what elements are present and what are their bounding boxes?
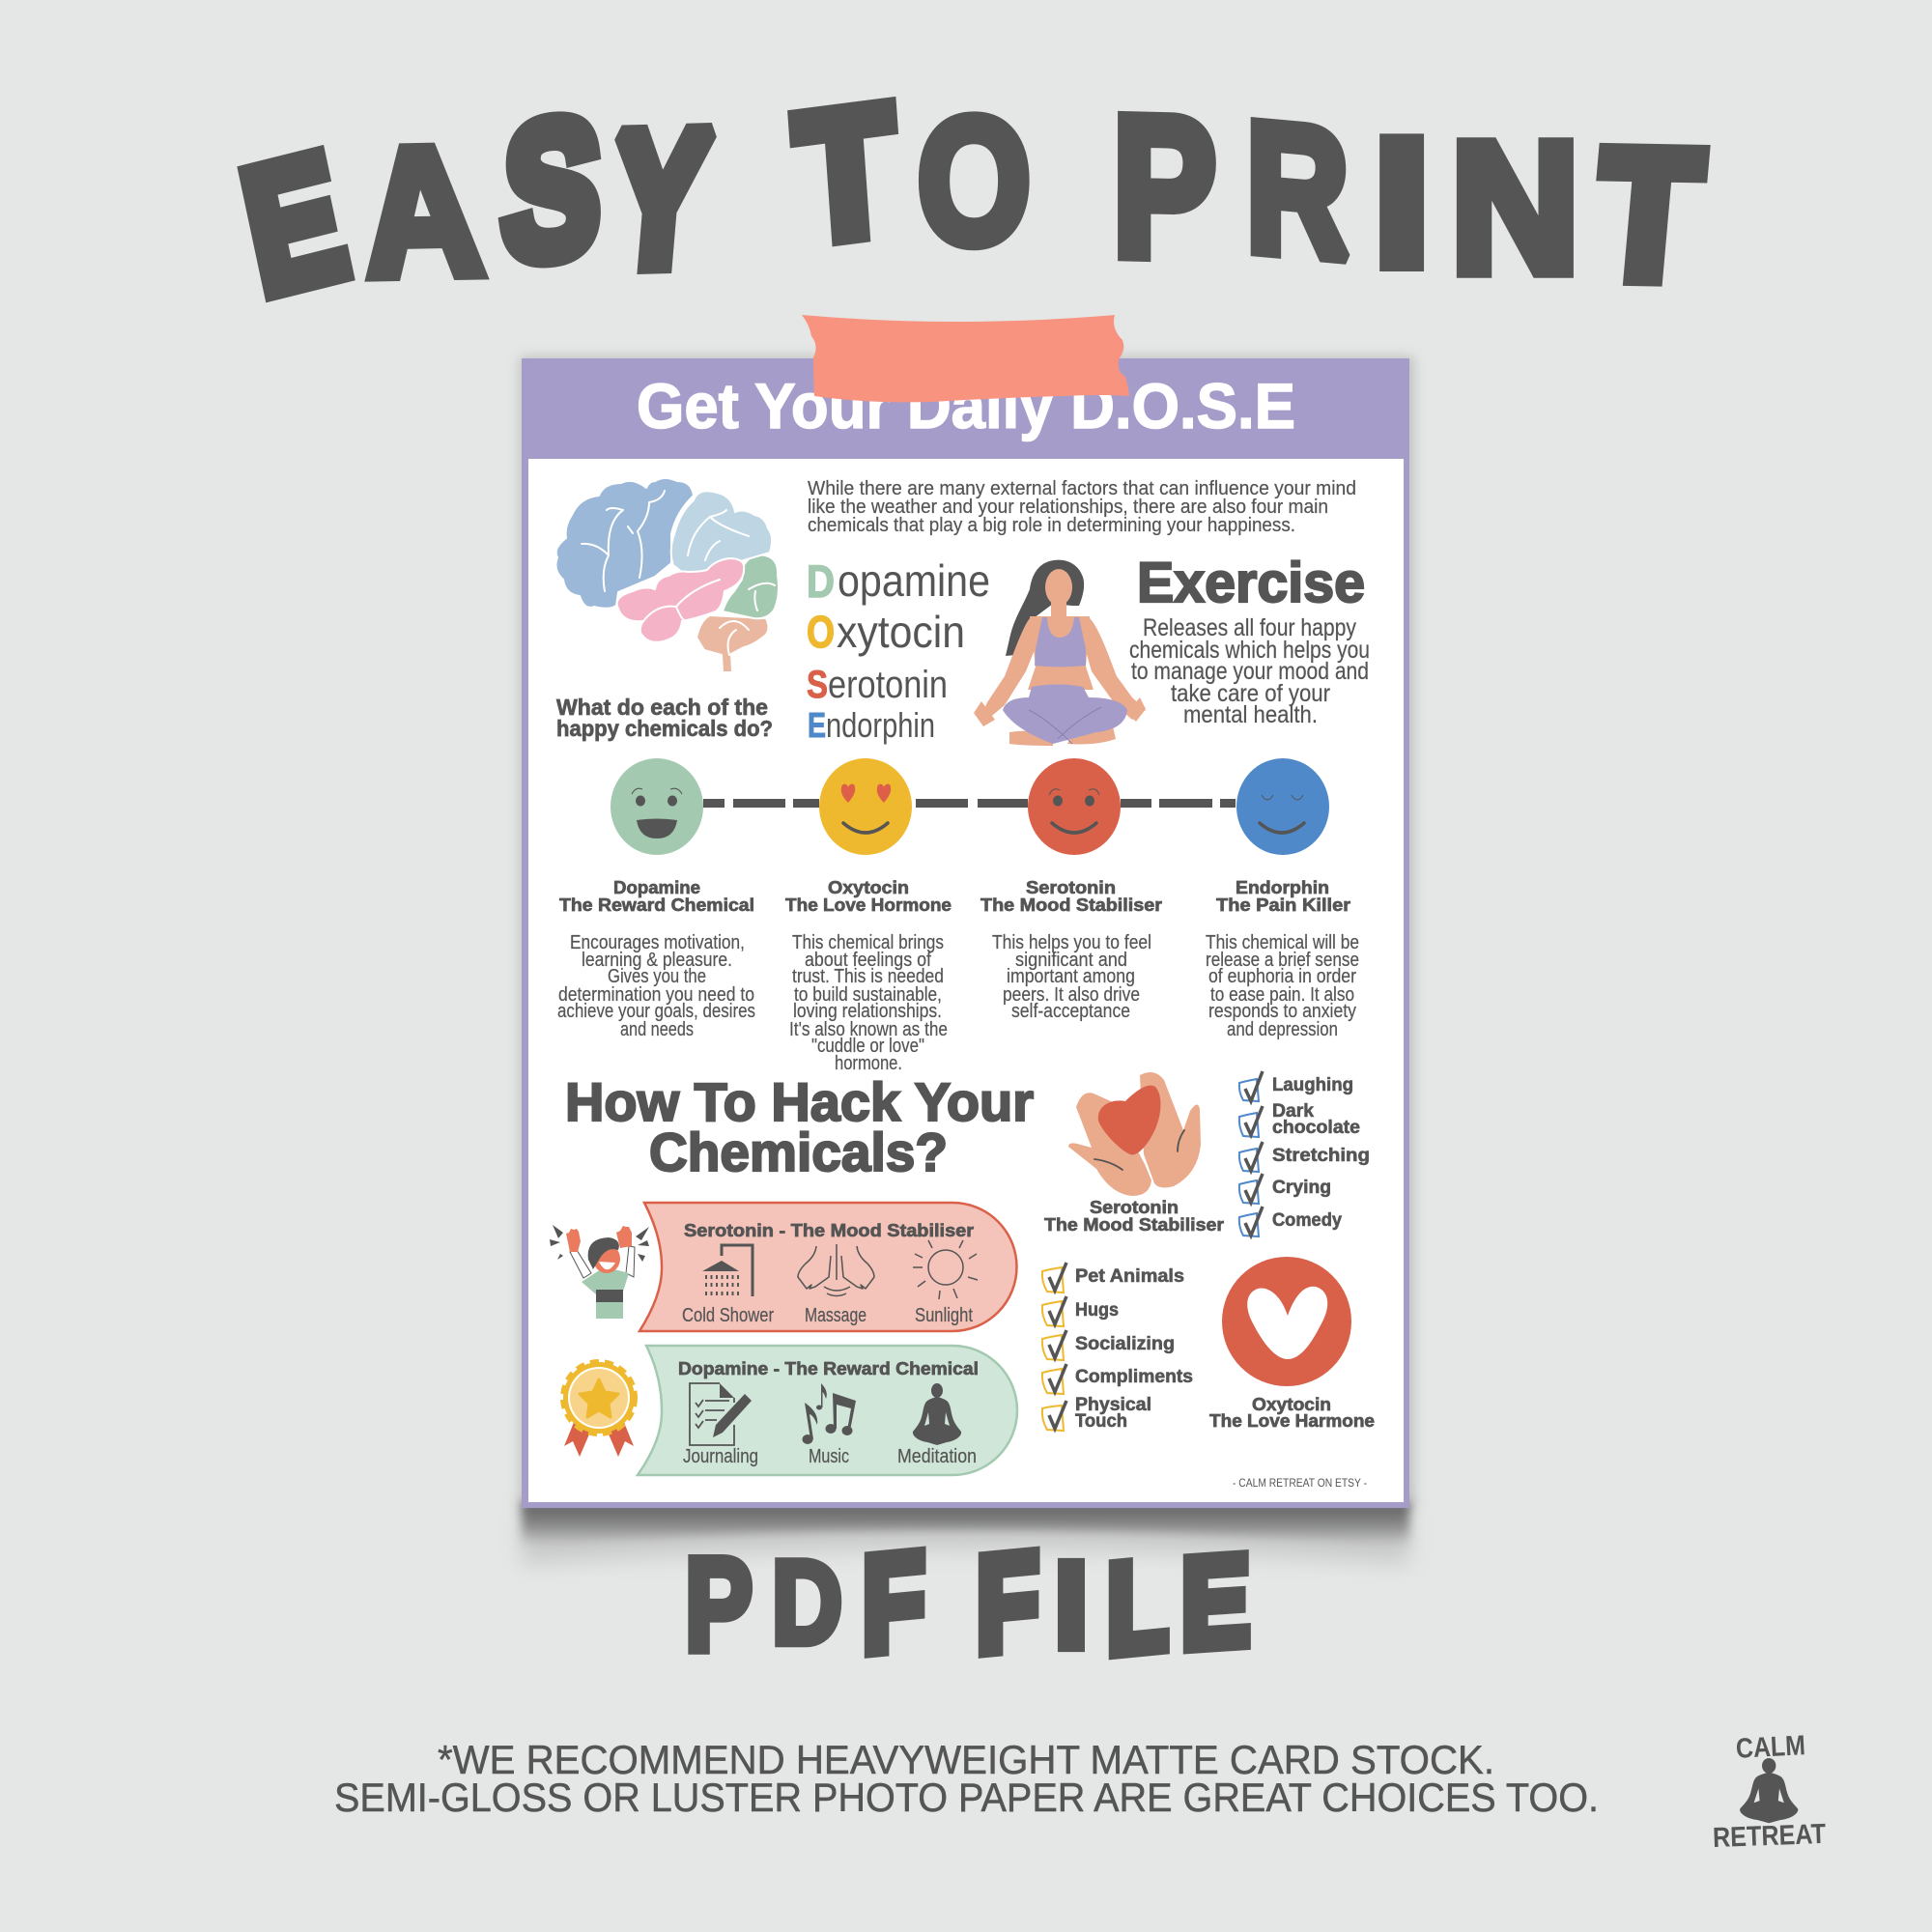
title: easy to print: R xyxy=(1246,84,1349,298)
title: easy to print: P xyxy=(1113,75,1216,298)
column: serotonin: significant and xyxy=(1015,950,1127,971)
item: socializing xyxy=(1042,1330,1175,1360)
panel: dopamine hacks: Music xyxy=(809,1446,849,1467)
dose acronym list: D xyxy=(807,555,835,607)
item: comedy: Comedy xyxy=(1272,1210,1342,1231)
question text: What do each of the xyxy=(556,695,768,720)
column: serotonin xyxy=(980,878,1162,1022)
item: comedy xyxy=(1239,1207,1342,1236)
intro text: While there are many external factors that can influence your mind xyxy=(808,478,1356,499)
panel: serotonin hacks: Massage xyxy=(805,1305,867,1326)
column: oxytocin: This chemical brings xyxy=(792,932,944,953)
column: oxytocin: to build sustainable, xyxy=(794,984,942,1006)
panel: serotonin hacks: Cold Shower xyxy=(682,1305,774,1326)
column: endorphin: to ease pain. It also xyxy=(1210,984,1354,1006)
title: easy to print: S xyxy=(500,78,603,301)
illustration: meditating woman xyxy=(974,560,1146,746)
poster xyxy=(522,358,1409,1508)
column: endorphin xyxy=(1206,878,1359,1040)
item: physical touch xyxy=(1042,1395,1151,1432)
column: oxytocin: trust. This is needed xyxy=(792,966,944,987)
subtitle: pdf file: L xyxy=(1107,1534,1168,1682)
subtitle: pdf file: F xyxy=(977,1525,1038,1681)
subtitle: pdf file: D xyxy=(772,1536,842,1668)
column: endorphin: Endorphin xyxy=(1236,878,1329,897)
exercise text: Releases all four happy xyxy=(1143,614,1356,641)
item: hugs: Hugs xyxy=(1075,1300,1119,1321)
title: easy to print: O xyxy=(918,81,1031,281)
item: laughing xyxy=(1239,1071,1353,1101)
exercise heading: Exercise xyxy=(1137,552,1365,614)
checklist: oxytocin xyxy=(1042,1263,1193,1432)
item: crying xyxy=(1239,1174,1331,1204)
question text xyxy=(556,695,773,741)
title: easy to print: N xyxy=(1451,103,1579,311)
dashed connector xyxy=(703,799,1236,808)
column: oxytocin: It's also known as the xyxy=(789,1019,948,1040)
icon: music xyxy=(802,1383,856,1444)
icon: brain xyxy=(555,478,779,672)
column: oxytocin xyxy=(785,878,952,1074)
heading: how to hack your chemicals: How To Hack Your xyxy=(565,1071,1034,1132)
column: dopamine xyxy=(557,878,755,1040)
dose acronym list: ndorphin xyxy=(826,705,935,745)
column: dopamine: Gives you the xyxy=(608,966,706,987)
icon: hands holding heart xyxy=(1068,1072,1201,1196)
paper recommendation note: SEMI-GLOSS OR LUSTER PHOTO PAPER ARE GREAT CHOICES TOO. xyxy=(334,1775,1599,1820)
intro text: like the weather and your relationships, there are also four main xyxy=(808,497,1328,518)
icon: journaling xyxy=(690,1383,752,1445)
poster credit: - CALM RETREAT ON ETSY - xyxy=(1233,1478,1367,1490)
exercise text: to manage your mood and xyxy=(1131,658,1369,685)
dose acronym list: erotonin xyxy=(828,664,948,706)
item: dark chocolate xyxy=(1239,1101,1360,1138)
paper recommendation note: *WE RECOMMEND HEAVYWEIGHT MATTE CARD STOCK. xyxy=(438,1737,1494,1782)
panel: serotonin hacks: Serotonin - The Mood Stabiliser xyxy=(684,1221,974,1240)
panel: dopamine hacks: Journaling xyxy=(683,1446,758,1467)
item: dark chocolate: chocolate xyxy=(1272,1118,1360,1138)
item: dark chocolate: Dark xyxy=(1272,1101,1314,1122)
paper recommendation note xyxy=(334,1737,1599,1820)
dose acronym list: E xyxy=(808,705,826,745)
logo: calm retreat xyxy=(1713,1730,1827,1854)
exercise text: take care of your xyxy=(1171,680,1330,707)
title: easy to print: T xyxy=(791,68,901,280)
subtitle: pdf file: P xyxy=(685,1531,753,1678)
dose acronym list: S xyxy=(807,664,828,706)
intro text: chemicals that play a big role in determining your happiness. xyxy=(808,515,1295,536)
heading: how to hack your chemicals xyxy=(565,1071,1034,1182)
dose acronym list xyxy=(807,555,990,745)
panel: serotonin hacks: Sunlight xyxy=(915,1305,973,1326)
subtitle: pdf file: F xyxy=(863,1525,924,1681)
item: crying: Crying xyxy=(1272,1178,1331,1198)
icon: endorphin face xyxy=(1236,758,1329,855)
column: dopamine: and needs xyxy=(620,1019,694,1040)
column: endorphin: responds to anxiety xyxy=(1208,1001,1356,1022)
column: dopamine: The Reward Chemical xyxy=(559,895,754,915)
item: stretching xyxy=(1239,1142,1370,1172)
column: serotonin: Serotonin xyxy=(1026,878,1116,897)
icon: massage xyxy=(798,1244,874,1296)
icon: medal xyxy=(563,1362,635,1457)
icon: meditation figure xyxy=(913,1383,961,1445)
poster title: Get Your Daily D.O.S.E xyxy=(637,370,1295,441)
column: serotonin: self-acceptance xyxy=(1011,1001,1130,1022)
item: laughing: Laughing xyxy=(1272,1075,1353,1095)
column: oxytocin: loving relationships. xyxy=(793,1001,942,1022)
column: endorphin: The Pain Killer xyxy=(1216,895,1350,915)
exercise text: mental health. xyxy=(1183,701,1318,728)
title: easy to print: E xyxy=(229,116,359,331)
exercise text: chemicals which helps you xyxy=(1129,637,1370,664)
column: serotonin: important among xyxy=(1007,966,1135,987)
dose acronym list: xytocin xyxy=(837,607,965,657)
icon: sunlight xyxy=(913,1240,978,1299)
column: oxytocin: about feelings of xyxy=(805,950,931,971)
intro text xyxy=(808,478,1356,536)
logo: calm retreat: CALM xyxy=(1735,1730,1806,1765)
column: oxytocin: Oxytocin xyxy=(828,878,909,897)
column: endorphin: This chemical will be xyxy=(1206,932,1359,953)
column: dopamine: Encourages motivation, xyxy=(570,932,745,953)
column: serotonin: This helps you to feel xyxy=(992,932,1151,953)
item: compliments xyxy=(1042,1364,1193,1394)
column: dopamine: Dopamine xyxy=(613,878,700,897)
question text: happy chemicals do? xyxy=(556,716,773,741)
oxytocin label xyxy=(1209,1395,1375,1431)
checklist: serotonin xyxy=(1239,1071,1370,1236)
column: oxytocin: hormone. xyxy=(835,1053,902,1074)
item: compliments: Compliments xyxy=(1075,1367,1193,1387)
dose acronym list: O xyxy=(807,607,835,657)
column: oxytocin: "cuddle or love" xyxy=(811,1036,924,1057)
item: physical touch: Physical xyxy=(1075,1395,1151,1415)
column: dopamine: achieve your goals, desires xyxy=(557,1001,755,1022)
heading: how to hack your chemicals: Chemicals? xyxy=(649,1122,948,1182)
icon: serotonin face xyxy=(1028,758,1121,855)
poster shadow xyxy=(520,356,1414,1565)
panel: dopamine hacks xyxy=(638,1346,1017,1475)
icon: cheering boy xyxy=(550,1225,649,1319)
panel: dopamine hacks: Dopamine - The Reward Chemical xyxy=(678,1359,979,1378)
column: dopamine: learning & pleasure. xyxy=(582,950,732,971)
item: hugs xyxy=(1042,1296,1119,1326)
column: dopamine: determination you need to xyxy=(558,984,754,1006)
item: pet animals xyxy=(1042,1263,1184,1293)
panel: dopamine hacks: Meditation xyxy=(897,1446,977,1467)
oxytocin label: Oxytocin xyxy=(1252,1395,1331,1414)
column: endorphin: release a brief sense xyxy=(1206,950,1359,971)
logo: calm retreat: RETREAT xyxy=(1713,1819,1827,1854)
column: endorphin: of euphoria in order xyxy=(1208,966,1356,987)
column: endorphin: and depression xyxy=(1227,1019,1338,1040)
column: serotonin: peers. It also drive xyxy=(1003,984,1140,1006)
serotonin label: The Mood Stabiliser xyxy=(1044,1215,1224,1235)
oxytocin label: The Love Harmone xyxy=(1209,1411,1375,1431)
title: easy to print: Y xyxy=(604,91,717,306)
item: stretching: Stretching xyxy=(1272,1146,1370,1166)
column: serotonin: The Mood Stabiliser xyxy=(980,895,1162,915)
item: pet animals: Pet Animals xyxy=(1075,1266,1184,1287)
icon: dopamine face xyxy=(611,758,703,855)
subtitle: pdf file: I xyxy=(1056,1539,1087,1672)
serotonin label xyxy=(1044,1198,1224,1235)
column: oxytocin: The Love Hormone xyxy=(785,895,952,915)
title: easy to print: A xyxy=(355,108,488,314)
title: easy to print xyxy=(229,68,1707,331)
title: easy to print: T xyxy=(1590,113,1707,317)
panel: serotonin hacks xyxy=(639,1203,1016,1331)
icon: oxytocin face xyxy=(819,758,912,855)
washi tape xyxy=(802,315,1129,402)
icon: heart circle xyxy=(1222,1257,1351,1386)
dose acronym list: opamine xyxy=(838,555,990,606)
subtitle: pdf file: E xyxy=(1181,1529,1250,1676)
item: socializing: Socializing xyxy=(1075,1334,1175,1354)
exercise text xyxy=(1129,614,1370,728)
icon: cold shower xyxy=(702,1245,753,1296)
serotonin label: Serotonin xyxy=(1090,1198,1179,1217)
subtitle: pdf file xyxy=(685,1525,1250,1682)
title: easy to print: I xyxy=(1377,105,1427,300)
item: physical touch: Touch xyxy=(1075,1411,1127,1432)
